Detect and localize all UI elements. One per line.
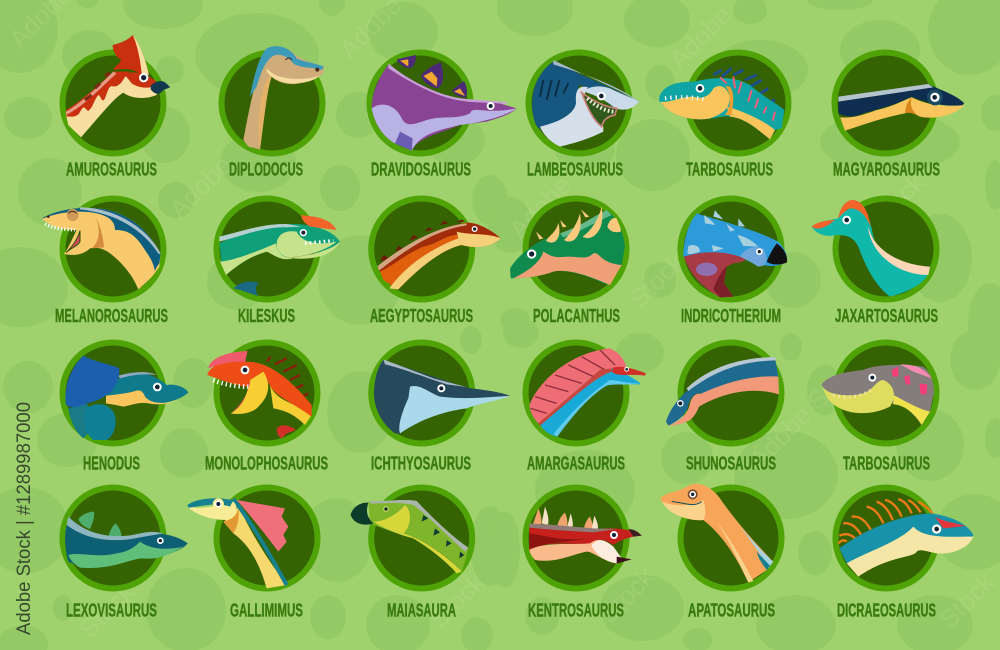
badge [216,488,318,588]
badge [371,488,472,588]
panel: Shunosaurus [666,342,782,474]
panel: Lambeosaurus [527,52,639,180]
label: TARBOSAURUS [843,454,930,474]
text: Stock [73,576,141,644]
dinosaur: Aegyptosaurus [378,219,501,289]
panel: Amurosaurus [62,35,170,180]
badge [836,342,936,444]
label: APATOSAURUS [688,600,775,620]
label: MAGYAROSAURUS [833,160,940,180]
label: KENTROSAURUS [528,600,624,620]
dinosaur: Lambeosaurus [532,60,639,147]
label: MONOLOPHOSAURUS [205,454,328,474]
badge [688,52,788,154]
panel: Monolophosaurus [205,342,328,474]
badge [371,342,472,444]
dinosaur: Gallimimus [187,498,288,588]
dinosaur: Kentrosaurus [529,507,642,564]
badge [62,198,164,300]
dinosaur: Tarbosaurus [659,68,784,139]
dinosaur: Kileskus [219,215,340,296]
label: DICRAEOSAURUS [837,600,936,620]
label: SHUNOSAURUS [686,454,776,474]
panel: Indricotherium [680,198,787,326]
panel: Tarbosaurus 2 [822,342,936,474]
text: Stock [593,561,661,629]
badge [370,52,470,154]
text: Stock [933,566,1000,634]
label: KILESKUS [238,306,295,326]
panel: Melanorosaurus [42,198,168,326]
panel: Henodus [62,342,188,474]
badge [528,52,630,154]
label: AMUROSAURUS [66,160,157,180]
panel: Tarbosaurus [659,52,788,180]
dinosaur: Shunosaurus [666,357,779,426]
text: Adobe Stock [743,348,869,474]
badge [526,342,626,444]
badge [836,198,936,300]
dinosaur: Ichthyosaurus [374,359,510,433]
text: Stock [623,246,691,314]
badge [836,488,936,588]
dinosaur: Indricotherium [683,210,787,297]
label: LAMBEOSAURUS [527,160,623,180]
text: Adobe [163,150,237,224]
label: TARBOSAURUS [686,160,773,180]
text: Adobe [233,490,307,564]
dinosaur: Monolophosaurus [207,351,312,438]
badge [62,52,164,154]
dinosaur: Amargasaurus [529,348,646,437]
panel: Gallimimus [187,488,318,620]
panel: Maiasaura [351,488,472,620]
badge [222,52,322,154]
label: MAIASAURA [387,600,456,620]
label: DIPLODOCUS [229,160,303,180]
badge [834,52,936,154]
dinosaur: Lexovisaurus [65,512,188,568]
panel: Dravidosaurus [370,52,517,180]
label: AMARGASAURUS [527,454,625,474]
badge [680,488,782,588]
panel: Ichthyosaurus [371,342,510,474]
dinosaur: Diplodocus [243,46,324,149]
panel: Dicraeosaurus [836,488,973,620]
badge [680,342,782,444]
dinosaur: Maiasaura [351,500,468,573]
dinosaur: Henodus [65,356,188,440]
badge [526,488,626,588]
label: MELANOROSAURUS [55,306,168,326]
label: INDRICOTHERIUM [681,306,781,326]
label: HENODUS [83,454,140,474]
vertical stock id text: Adobe Stock | #1289987000 [14,402,35,635]
panel: Kileskus [216,198,340,326]
panel: Aegyptosaurus [370,198,501,326]
label: ICHTHYOSAURUS [371,454,471,474]
label: DRAVIDOSAURUS [371,160,471,180]
dinosaur: Dicraeosaurus [838,499,973,577]
dinosaur: Amurosaurus [66,35,170,137]
badge [216,198,318,300]
label: POLACANTHUS [533,306,620,326]
dinosaur: Magyarosaurus [838,84,964,131]
text: Stock [863,166,931,234]
dinosaur: Apatosaurus [660,484,773,582]
text: Adobe [663,0,737,74]
badge [62,342,164,444]
label: AEGYPTOSAURUS [370,306,473,326]
panel: Kentrosaurus [526,488,642,620]
panel: Diplodocus [222,46,324,180]
text: Adobe [503,170,577,244]
dinosaur: Melanorosaurus [42,207,161,289]
panel: Jaxartosaurus [812,198,938,326]
badge [526,198,626,300]
text: Stock [423,566,491,634]
panel: Magyarosaurus [833,52,964,180]
badge [680,198,782,300]
dinosaur: Dravidosaurus [372,55,517,151]
text: Stock [83,236,151,304]
badge [216,342,318,444]
badge [371,198,472,300]
dinosaur: Jaxartosaurus [812,200,930,297]
label: JAXARTOSAURUS [835,306,938,326]
dinosaur: Polacanthus [510,207,625,285]
panel: Lexovisaurus [62,488,188,620]
panel: Polacanthus [510,198,626,326]
label: LEXOVISAURUS [66,600,157,620]
panel: Apatosaurus [660,484,782,620]
badge [62,488,164,588]
dinosaur: Tarbosaurus 2 [822,364,934,425]
panel: Amargasaurus [526,342,646,474]
label: GALLIMIMUS [230,600,303,620]
